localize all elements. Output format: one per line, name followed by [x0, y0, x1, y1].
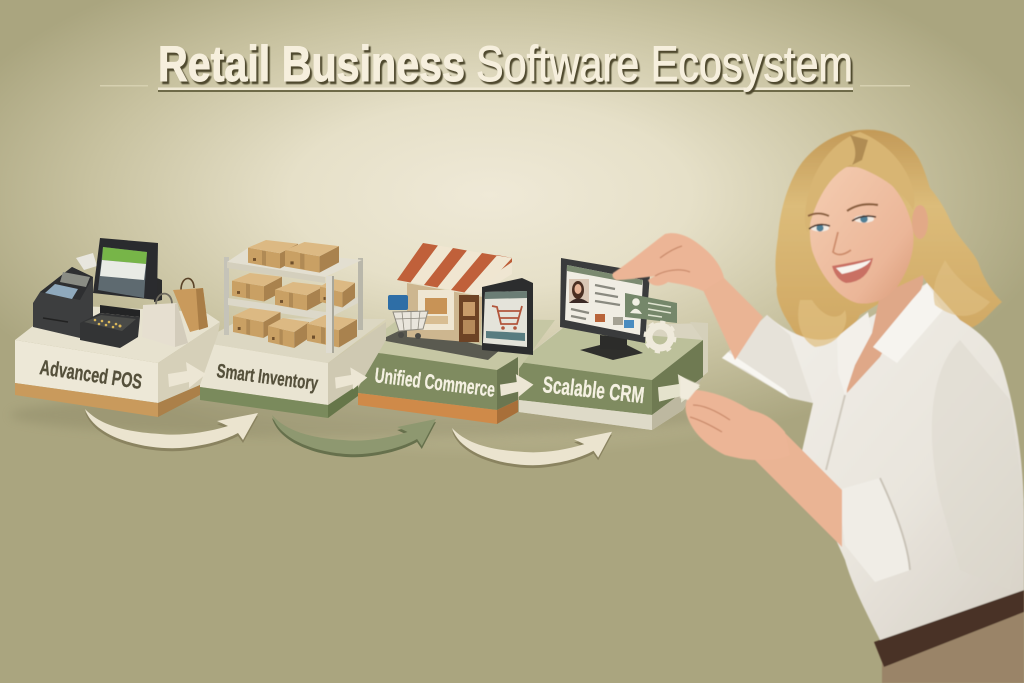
- title: Retail Business: [160, 38, 467, 94]
- hair back: [775, 130, 1002, 347]
- icon: CRM monitor: [560, 258, 650, 360]
- arrow: Scalable CRM onward: [658, 374, 700, 403]
- icon: customer card: [625, 293, 677, 323]
- sleeve shading: [722, 315, 813, 403]
- curved arrow 2: [272, 415, 436, 457]
- shirt torso: [722, 283, 1024, 640]
- icon: shop with awning: [380, 243, 512, 360]
- platform top: [519, 328, 703, 380]
- pointing hand: [612, 233, 724, 291]
- icon: gear: [646, 322, 674, 352]
- title: [100, 36, 910, 94]
- trousers: [882, 605, 1024, 683]
- arrow: Unified Commerce to Scalable CRM: [500, 374, 533, 397]
- title: Software Ecosystem: [476, 36, 853, 92]
- step: Advanced POS platform: [15, 238, 220, 417]
- icon: inventory shelves: [224, 240, 363, 353]
- curved arrow 1: [85, 409, 258, 451]
- pointing arm: [703, 277, 763, 360]
- step: Scalable CRM platform: [519, 258, 708, 430]
- title: Retail Business: [158, 36, 465, 92]
- curved arrow 3: [452, 428, 612, 468]
- icon: shopping bags: [142, 278, 208, 347]
- label: Unified Commerce: Unified Commerce: [373, 364, 496, 402]
- label: Advanced POS: Advanced POS: [38, 356, 144, 394]
- icon: tablet with cart: [482, 278, 533, 355]
- ear: [912, 205, 928, 239]
- icon: shopping cart: [388, 295, 428, 339]
- eyes and brows: [808, 204, 878, 232]
- nose: [833, 232, 851, 255]
- arrow: Smart Inventory to Unified Commerce: [335, 367, 367, 389]
- face: [810, 167, 914, 304]
- lower forearm: [750, 418, 842, 547]
- arrow: Advanced POS to Smart Inventory: [168, 362, 206, 388]
- presenter: [612, 130, 1024, 683]
- mouth: [832, 258, 873, 283]
- label: Scalable CRM: Scalable CRM: [541, 371, 646, 408]
- hair front: [805, 132, 915, 232]
- step: Smart Inventory platform: [200, 240, 386, 418]
- collar: [873, 283, 943, 363]
- title: Software Ecosystem: [478, 38, 855, 94]
- label: Smart Inventory: Smart Inventory: [215, 360, 319, 395]
- icon: POS terminal: [33, 238, 162, 348]
- platform shadow: [10, 393, 710, 437]
- belt: [874, 590, 1024, 667]
- neck and chest: [847, 275, 923, 393]
- step: Unified Commerce platform: [358, 243, 555, 424]
- lower sleeve: [838, 478, 910, 582]
- holding hand: [686, 390, 790, 460]
- paper arrow in hand: [680, 376, 700, 400]
